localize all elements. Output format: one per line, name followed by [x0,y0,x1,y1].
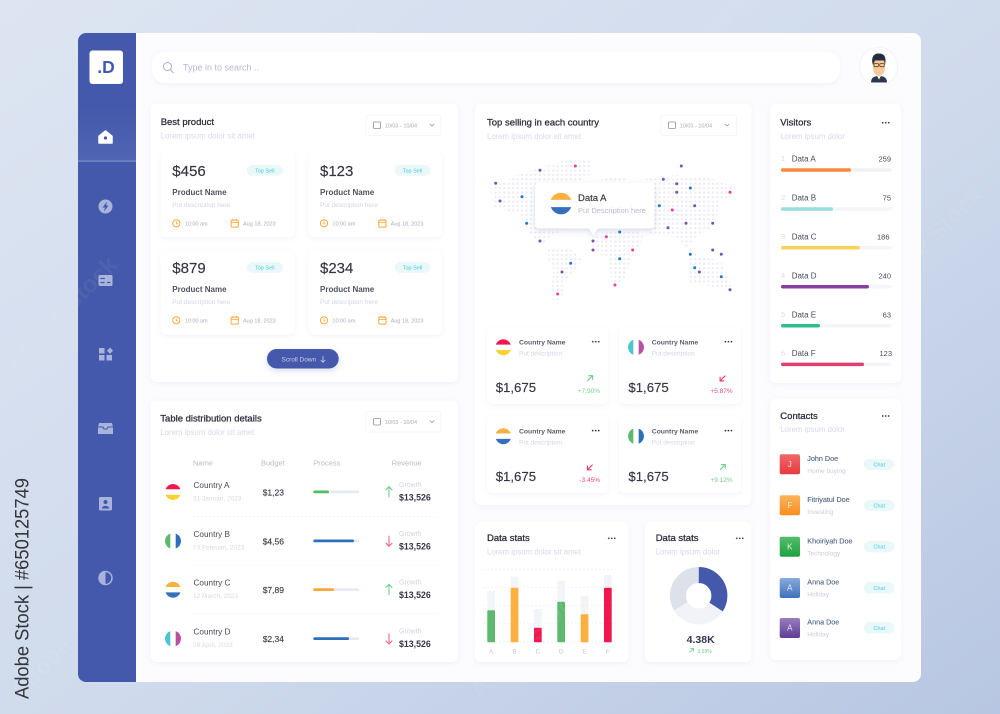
contact: John Doe: J [788,460,792,469]
row: Data C [781,232,892,250]
product card 2: $123 [320,163,353,180]
row: Data A: 1 [781,154,785,163]
icon: contact book [99,497,112,510]
icon: inbox [98,423,113,434]
table row: Country A: Country A [194,481,230,490]
contact: Khoiriyah Doe [780,536,894,557]
table row: Country D: $13,526 [399,639,431,649]
contact: Anna Doe 2: Chat [873,626,885,632]
contact: Khoiriyah Doe: Chat [873,545,885,551]
subheading: Lorem ipsum dolor [780,132,845,141]
table row: Country A: Growth [399,482,422,489]
menu dots [882,415,890,417]
product card 4 [309,251,442,334]
faint diagonal stock overlay: Adobe Stock [0,251,123,374]
contact: Anna Doe: Chat [873,586,885,592]
bar chart [483,569,617,656]
search placeholder: Type in to search .. [183,62,259,72]
row: Data A: 259 [878,154,891,164]
donut chart [678,575,719,616]
panel: contacts [770,398,901,660]
icon: half circle theme [99,572,112,584]
panel: table distribution details [150,400,458,662]
sidebar [78,33,136,682]
table row: Country C [165,579,431,600]
panel: best product [150,104,458,382]
table header: Revenue [392,458,422,468]
country card 3: -3.45% [579,477,600,484]
heading: top selling: Top selling in each country [487,118,599,128]
table row: Country B: Growth [399,531,422,538]
map tooltip: Data A: Data A [578,193,607,204]
bar chart: E [582,648,587,656]
row: Data D: Data D [792,272,817,280]
bar chart: C [535,648,540,656]
country card 4: +9.12% [710,477,733,484]
donut total value: 4.38K [687,634,715,646]
table row: Country C: $13,526 [399,590,431,600]
menu dots [608,537,616,539]
contact: Fitriyatul Doe [780,495,894,516]
table header [193,458,422,468]
row: Data A [781,154,892,172]
table row: Country D: Country D [194,628,230,637]
product card 3: Product Name [172,285,227,294]
panel: data stats donut [645,522,752,662]
contact: John Doe [780,454,894,475]
product card 4: Aug 18, 2023 [391,318,423,324]
row: Data E: Data E [792,310,816,320]
contact: Anna Doe: A [787,584,793,593]
logo [90,50,123,84]
table row: Country D [165,628,431,649]
subheading: Lorem ipsum dolor sit amet [487,548,582,556]
date selector [366,412,441,432]
country card 4: Put description [652,439,695,446]
product card 3: Aug 18, 2023 [243,318,276,324]
icon: lightning [98,200,112,214]
product card 1: Put description here [172,202,230,209]
product card 3: Top Sell [255,266,275,272]
row: Data F: 123 [879,349,892,358]
bar chart: B [512,648,517,656]
app window [78,33,921,682]
contact: Anna Doe 2 [780,618,894,639]
country card 2: +5.87% [710,388,733,395]
table row: Country A [165,481,431,502]
country card 2 [619,328,741,404]
table row: Country D: 28 April, 2023 [193,642,233,649]
date selector [661,115,736,136]
row: Data E: 63 [883,310,891,320]
growth indicator: 3.59% [698,649,712,655]
country card 3 [487,417,608,493]
contact: Fitriyatul Doe: F [787,501,792,510]
contact: Fitriyatul Doe: Chat [873,503,885,509]
row: Data F [781,348,892,366]
menu dots [736,537,744,539]
table row: Country B: 03 Februari, 2023 [193,544,245,552]
country card 2: Country Name [652,340,698,346]
scroll down button [267,349,339,368]
bar chart: A [489,648,494,656]
product card 2: 10:00 am [332,221,356,227]
icon: search [164,62,174,73]
product card 3: 10:00 am [185,318,208,324]
country card 1: Country Name [519,340,566,346]
row: Data B [781,193,892,211]
product card 4: Top Sell [403,266,422,272]
country card 2: $1,675 [628,380,669,395]
date selector: 10/03 - 10/04 [680,123,712,129]
product card 2: Put description here [320,202,378,209]
product card 2: Aug 18, 2023 [391,221,423,227]
table row: Country C: $7,89 [263,585,284,595]
heading: Visitors [780,118,812,128]
heading: Contacts [780,411,818,422]
dotted world map [490,160,732,304]
date selector: 10/03 - 10/04 [385,123,417,129]
country card 1 [487,328,608,404]
subheading: Lorem ipsum dolor [656,548,721,556]
faint diagonal stock overlay: Adobe [5,632,77,704]
row: Data E: 5 [781,310,785,319]
map tooltip: Data A: Put Description here [578,206,646,215]
row: Data C: 3 [781,232,785,241]
contact: Fitriyatul Doe: Fitriyatul Doe [807,495,850,504]
product card 3 [161,251,295,334]
heading: table: Table distribution details [160,414,262,424]
row: Data C: Data C [792,232,817,242]
table row: Country B: Country B [194,530,230,539]
product card 3: Put description here [172,299,230,306]
table row: Country B: $4,56 [263,536,284,546]
date selector [366,115,441,136]
icon: id card [98,275,112,286]
icon: widgets [99,348,113,360]
row: Data E [781,310,892,328]
product card 4: Put description here [320,299,378,306]
contact: Anna Doe 2: A [787,624,793,633]
icon: home [99,131,112,143]
table row: Country D: $2,34 [263,634,284,644]
product card 1: 10:00 am [185,221,208,227]
product card 2: Product Name [320,188,375,197]
row: Data A: Data A [792,154,816,164]
user avatar [860,48,898,86]
table row: Country A: $1,23 [263,488,284,498]
row: Data B: 75 [883,194,891,202]
country card 4: $1,675 [628,469,669,484]
table row: Country C: Country C [194,579,230,588]
contact: Khoiriyah Doe: Technology [807,550,841,557]
row: Data F: Data F [792,349,816,358]
product card 1: Top Sell [255,169,275,175]
product card 1 [161,153,295,237]
logo: .D [97,57,115,77]
table row: Country A: $13,526 [399,492,431,502]
product card 3: $879 [172,260,206,277]
bar chart: D [559,648,564,656]
contact: John Doe: Chat [873,462,885,468]
row: Data D: 240 [878,272,891,280]
product card 4: $234 [320,260,353,277]
contact: Khoiriyah Doe: Khoiriyah Doe [807,536,852,545]
contact: Anna Doe: Holiday [807,592,830,599]
country card 1: $1,675 [496,380,536,395]
heading: Data stats [656,533,699,544]
table row: Country A: 31 Januari, 2023 [193,496,242,502]
heading: best product: Best product [161,117,214,128]
contact: Anna Doe 2: Anna Doe [807,618,839,627]
product card 1: $456 [172,163,206,180]
menu dots [882,122,890,124]
row: Data B: 2 [781,193,785,202]
table header: Budget [261,458,286,468]
map tooltip: Data A [535,182,654,235]
row: Data B: Data B [792,194,816,202]
scroll down button: Scroll Down [282,356,317,363]
country card 3: $1,675 [496,469,536,484]
row: Data F: 6 [781,348,785,358]
panel: visitors [770,104,901,383]
table row: Country B: $13,526 [399,542,431,552]
subheading: Lorem ipsum dolor sit amet [161,132,256,140]
panel: top selling in each country [475,104,752,505]
contact: Khoiriyah Doe: K [787,542,793,551]
table row: Country C: 12 March, 2023 [193,593,239,600]
product card 4: 10:00 am [332,318,356,324]
search bar [152,52,840,83]
contact: Fitriyatul Doe: Investing [807,509,834,516]
country card 4 [619,417,741,493]
bar chart: F [606,648,610,656]
faint diagonal stock overlay: Adobe Stock [865,181,988,304]
panel: data stats bar chart [475,522,628,662]
table row: Country C: Growth [399,580,422,587]
product card 4: Product Name [320,285,375,294]
table header: Name [193,458,213,468]
country card 2: Put description [652,350,695,358]
product card 2 [309,153,442,237]
contact: Anna Doe [780,578,894,599]
table row: Country B [165,530,431,552]
subheading: Lorem ipsum dolor sit amet [160,428,255,437]
contact: John Doe: John Doe [807,454,838,463]
row: Data D: 4 [781,271,785,280]
date selector: 10/03 - 10/04 [385,420,417,426]
side credit label: Adobe Stock | #650125749 [12,478,34,699]
country card 3: Country Name [519,428,566,435]
faint diagonal stock overlay: Adobe Stock [465,581,588,704]
product card 2: Top Sell [403,169,422,175]
contact: Anna Doe 2: Holiday [807,632,830,639]
table header: Process [313,458,341,468]
contact: John Doe: Home buying [807,468,846,475]
row: Data D [781,271,892,288]
country card 1: Put description [519,350,562,358]
row: Data C: 186 [877,232,890,242]
contact: Anna Doe: Anna Doe [807,578,839,587]
subheading: Lorem ipsum dolor [780,425,845,434]
country card 3: Put description [519,439,562,446]
subheading: Lorem ipsum dolor sit amet [487,132,582,141]
product card 1: Aug 18, 2023 [243,221,276,227]
table row: Country D: Growth [399,629,422,636]
country card 4: Country Name [652,428,698,435]
country card 1: +7.90% [578,388,600,395]
product card 1: Product Name [172,188,227,197]
heading: Data stats [487,533,530,544]
